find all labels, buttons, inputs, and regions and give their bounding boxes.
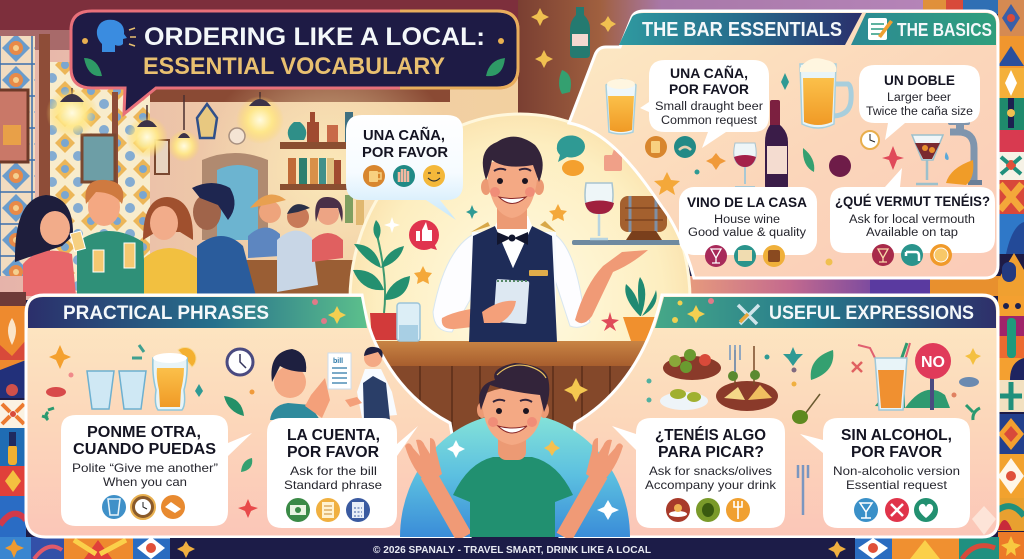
title banner: ESSENTIAL VOCABULARY bbox=[143, 53, 445, 80]
icon trio bbox=[666, 498, 750, 522]
illustration: alcohol free drink bbox=[852, 343, 951, 410]
wood bar front bbox=[390, 366, 632, 433]
small panel decorations bbox=[645, 73, 904, 266]
illustration: small beer bbox=[606, 79, 636, 134]
card: qué vermut: ¿QUÉ VERMUT TENÉIS? bbox=[835, 193, 990, 209]
card: un doble: Twice the caña size bbox=[866, 106, 973, 118]
notepad bbox=[482, 279, 529, 324]
footer bar: © 2026 SPANALY - TRAVEL SMART, DRINK LIKE A LOCAL bbox=[373, 544, 652, 556]
icon trio bbox=[854, 498, 938, 522]
bar top bbox=[376, 341, 646, 366]
card: ponme otra: PONME OTRA, bbox=[87, 424, 201, 441]
icon trio bbox=[363, 165, 445, 187]
card: qué vermut bbox=[830, 168, 995, 266]
card: sin alcohol: SIN ALCOHOL, bbox=[841, 427, 952, 444]
background: tavern scene bbox=[0, 0, 1000, 300]
card: tenéis algo bbox=[612, 418, 785, 528]
doorway bbox=[202, 153, 268, 240]
panel header: the bar essentials: THE BAR ESSENTIALS bbox=[642, 19, 842, 41]
upper right backdrop bbox=[518, 0, 928, 120]
central circle: bar scene bbox=[348, 112, 692, 432]
card: ponme otra: CUANDO PUEDAS bbox=[73, 441, 216, 458]
dome sparkles bbox=[447, 440, 619, 520]
bottom tile row left bbox=[0, 537, 170, 559]
illustration: customer and waiter with bill: bill bbox=[333, 358, 343, 365]
wall tiles bbox=[0, 34, 150, 292]
icon trio bbox=[705, 245, 785, 267]
card: sin alcohol bbox=[800, 418, 970, 528]
icon: speaking head bbox=[97, 20, 136, 52]
card: vino de la casa bbox=[679, 187, 817, 267]
card: una caña: UNA CAÑA, bbox=[670, 64, 748, 81]
icon trio bbox=[102, 495, 185, 519]
card: sin alcohol: Non-alcoholic version bbox=[833, 464, 960, 478]
card: qué vermut: Ask for local vermouth bbox=[849, 214, 975, 226]
tray with wine and barrel bbox=[572, 183, 684, 245]
card: la cuenta bbox=[267, 418, 418, 528]
card: ponme otra: When you can bbox=[103, 475, 187, 489]
gap strip between right panels bbox=[660, 276, 875, 296]
customer head bbox=[477, 363, 549, 460]
illustration: beer mug bbox=[800, 58, 851, 128]
customer at the bar bbox=[400, 363, 630, 537]
small panel decorations bbox=[42, 345, 258, 518]
panel: useful expressions bbox=[560, 295, 998, 537]
illustration: customer and waiter with bill bbox=[270, 347, 397, 420]
banner ornaments bbox=[82, 38, 505, 76]
card: la cuenta: Ask for the bill bbox=[290, 464, 377, 478]
waiter bbox=[433, 137, 648, 342]
card: un doble: Larger beer bbox=[887, 92, 951, 104]
panel header: the bar essentials bbox=[619, 13, 862, 45]
foreground friends bbox=[15, 180, 256, 296]
card: vino de la casa: Good value & quality bbox=[688, 227, 806, 239]
title banner bbox=[71, 11, 518, 114]
card: una caña: POR FAVOR bbox=[669, 81, 749, 97]
tile band behind panels bbox=[870, 0, 1000, 296]
panel header: practical phrases: PRACTICAL PHRASES bbox=[63, 303, 269, 324]
customer arms bbox=[405, 438, 623, 537]
right tile column bbox=[998, 0, 1024, 559]
speech bubble: una caña bbox=[346, 115, 463, 220]
card: un doble: UN DOBLE bbox=[884, 72, 955, 88]
card: vino de la casa: House wine bbox=[714, 214, 780, 226]
icon trio bbox=[872, 244, 952, 266]
illustration: vermouth and tap bbox=[912, 120, 982, 185]
waiter arms bbox=[433, 232, 648, 332]
card: tenéis algo: Ask for snacks/olives bbox=[649, 464, 772, 478]
waiter head bbox=[481, 137, 544, 229]
speech bubble: una caña: UNA CAÑA, bbox=[363, 126, 445, 144]
colored dome bbox=[400, 413, 630, 537]
card: ponme otra: Polite “Give me another” bbox=[72, 461, 218, 475]
background patrons bbox=[240, 195, 370, 294]
card: tenéis algo: ¿TENÉIS ALGO bbox=[655, 425, 766, 444]
card: tenéis algo: Accompany your drink bbox=[645, 478, 777, 492]
icon trio bbox=[286, 498, 370, 522]
shirt and vest bbox=[469, 216, 557, 342]
card: una caña bbox=[640, 60, 769, 148]
card: la cuenta: Standard phrase bbox=[284, 478, 382, 492]
panel header: practical phrases bbox=[28, 297, 367, 328]
card: un doble bbox=[859, 65, 980, 140]
left tile column bbox=[0, 292, 26, 538]
hanging lamps bbox=[46, 87, 284, 162]
illustration: wine bottle and glass bbox=[734, 100, 788, 189]
speech bubble: una caña: POR FAVOR bbox=[362, 144, 448, 161]
customer shirt bbox=[453, 457, 573, 537]
title text: ORDERING LIKE A LOCAL: bbox=[144, 23, 485, 51]
bottle shelves bbox=[280, 112, 364, 225]
bottom tile row right bbox=[855, 537, 999, 559]
card: una caña: Small draught beer bbox=[655, 101, 763, 113]
card: vino de la casa: VINO DE LA CASA bbox=[687, 194, 807, 210]
illustration: clock bbox=[227, 349, 253, 375]
panel header: the basics bbox=[851, 13, 996, 45]
small sparkles in circle bbox=[384, 205, 588, 402]
illustration: tapas plates bbox=[660, 345, 778, 411]
card: sin alcohol: Essential request bbox=[846, 478, 948, 492]
card: la cuenta: POR FAVOR bbox=[287, 444, 379, 461]
panel: the bar essentials bbox=[569, 11, 998, 278]
plant on bar right bbox=[623, 277, 657, 341]
small panel decorations bbox=[646, 347, 996, 535]
drinks bbox=[70, 231, 135, 272]
warm light glow bbox=[200, 50, 460, 290]
decor above right panel bbox=[531, 7, 616, 94]
illustration: alcohol free drink: NO bbox=[921, 354, 945, 371]
panel header: useful expressions bbox=[655, 297, 996, 328]
panel header: the basics: THE BASICS bbox=[897, 20, 992, 40]
card: una caña: Common request bbox=[661, 115, 758, 127]
floating chat and like icons bbox=[409, 135, 622, 331]
card: tenéis algo: PARA PICAR? bbox=[658, 444, 764, 461]
panel: practical phrases bbox=[26, 295, 470, 537]
wall pictures bbox=[0, 90, 169, 182]
banner shape bbox=[71, 11, 518, 114]
plant and glass on bar left bbox=[353, 220, 420, 341]
card: la cuenta: LA CUENTA, bbox=[287, 427, 380, 444]
card: ponme otra bbox=[61, 415, 252, 526]
card: sin alcohol: POR FAVOR bbox=[851, 444, 942, 461]
card: qué vermut: Available on tap bbox=[866, 227, 958, 239]
illustration: empty glasses and full beer bbox=[87, 347, 196, 410]
footer bar bbox=[170, 538, 855, 559]
panel header: useful expressions: USEFUL EXPRESSIONS bbox=[769, 303, 974, 324]
